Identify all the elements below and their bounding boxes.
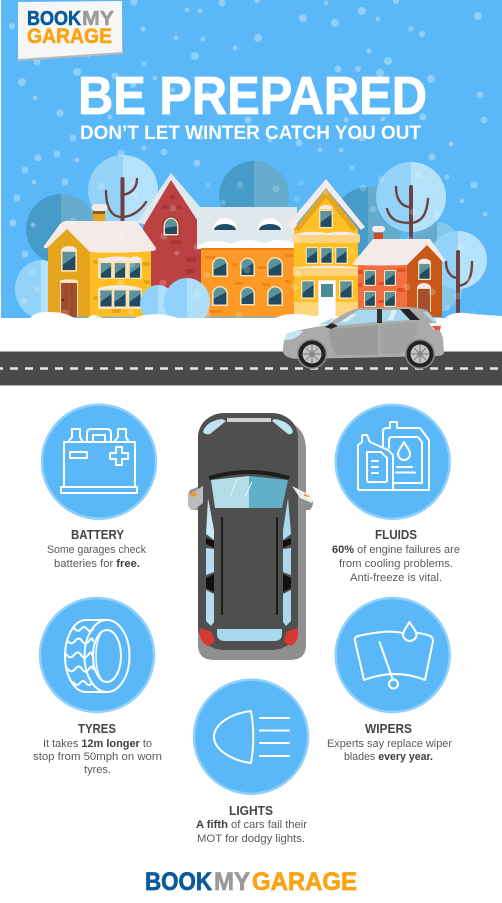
panel: lights: MOT for dodgy lights.	[197, 833, 305, 845]
panel: battery	[42, 405, 156, 570]
falling snow: foreground	[20, 172, 476, 318]
background trees and circles	[15, 155, 487, 318]
house: red brick	[137, 173, 201, 317]
panel: tyres: It takes 12m longer to	[43, 738, 152, 750]
panel: lights: LIGHTS	[229, 804, 273, 818]
panel: lights: A fifth of cars fail their	[196, 819, 307, 831]
panel: fluids: 60% of engine failures are	[332, 544, 460, 556]
logo: bottom: MY	[214, 868, 250, 896]
icon: fluid bottles	[358, 422, 429, 490]
icon: tyre	[65, 620, 130, 692]
falling snow: sky	[9, 0, 488, 258]
panel: wipers	[327, 598, 452, 763]
logo: bottom	[145, 868, 357, 896]
icon: headlight	[214, 711, 289, 763]
icon: windscreen wiper	[355, 622, 433, 688]
bushes	[140, 278, 210, 326]
car side view	[283, 307, 444, 369]
winter sky	[1, 0, 502, 318]
panel: lights	[194, 680, 308, 845]
panel: tyres: TYRES	[78, 722, 116, 736]
panel: wipers: blades every year.	[344, 751, 433, 763]
logo sign: top	[18, 1, 123, 61]
title: BE PREPARED	[78, 66, 427, 126]
snow ground	[1, 312, 502, 352]
logo sign: top: MY	[82, 8, 115, 30]
panel: wipers: Experts say replace wiper	[327, 738, 452, 750]
panel: fluids: FLUIDS	[375, 528, 417, 542]
house: tall yellow	[287, 179, 365, 317]
panel: battery: Some garages check	[47, 544, 146, 556]
logo sign: top: GARAGE	[27, 25, 112, 48]
panel: tyres	[33, 598, 162, 776]
panel: battery: batteries for free.	[54, 558, 140, 570]
house: red-orange cottage	[353, 226, 445, 317]
panel: fluids	[332, 405, 460, 584]
road	[0, 351, 502, 386]
subtitle: DON’T LET WINTER CATCH YOU OUT	[80, 122, 421, 144]
panel: fluids: from cooling problems.	[339, 558, 453, 570]
house: yellow cottage	[44, 204, 156, 317]
logo sign: top: BOOK	[27, 8, 82, 30]
panel: tyres: tyres.	[84, 764, 111, 776]
panel: fluids: Anti-freeze is vital.	[350, 572, 442, 584]
logo: bottom: GARAGE	[252, 868, 357, 896]
panel: wipers: WIPERS	[365, 722, 412, 736]
house: orange	[197, 207, 297, 317]
panel: tyres: stop from 50mph on worn	[33, 751, 162, 763]
logo: bottom: BOOK	[145, 868, 212, 896]
icon: battery	[61, 429, 137, 493]
panel: battery: BATTERY	[71, 528, 125, 542]
car top view	[188, 413, 313, 660]
